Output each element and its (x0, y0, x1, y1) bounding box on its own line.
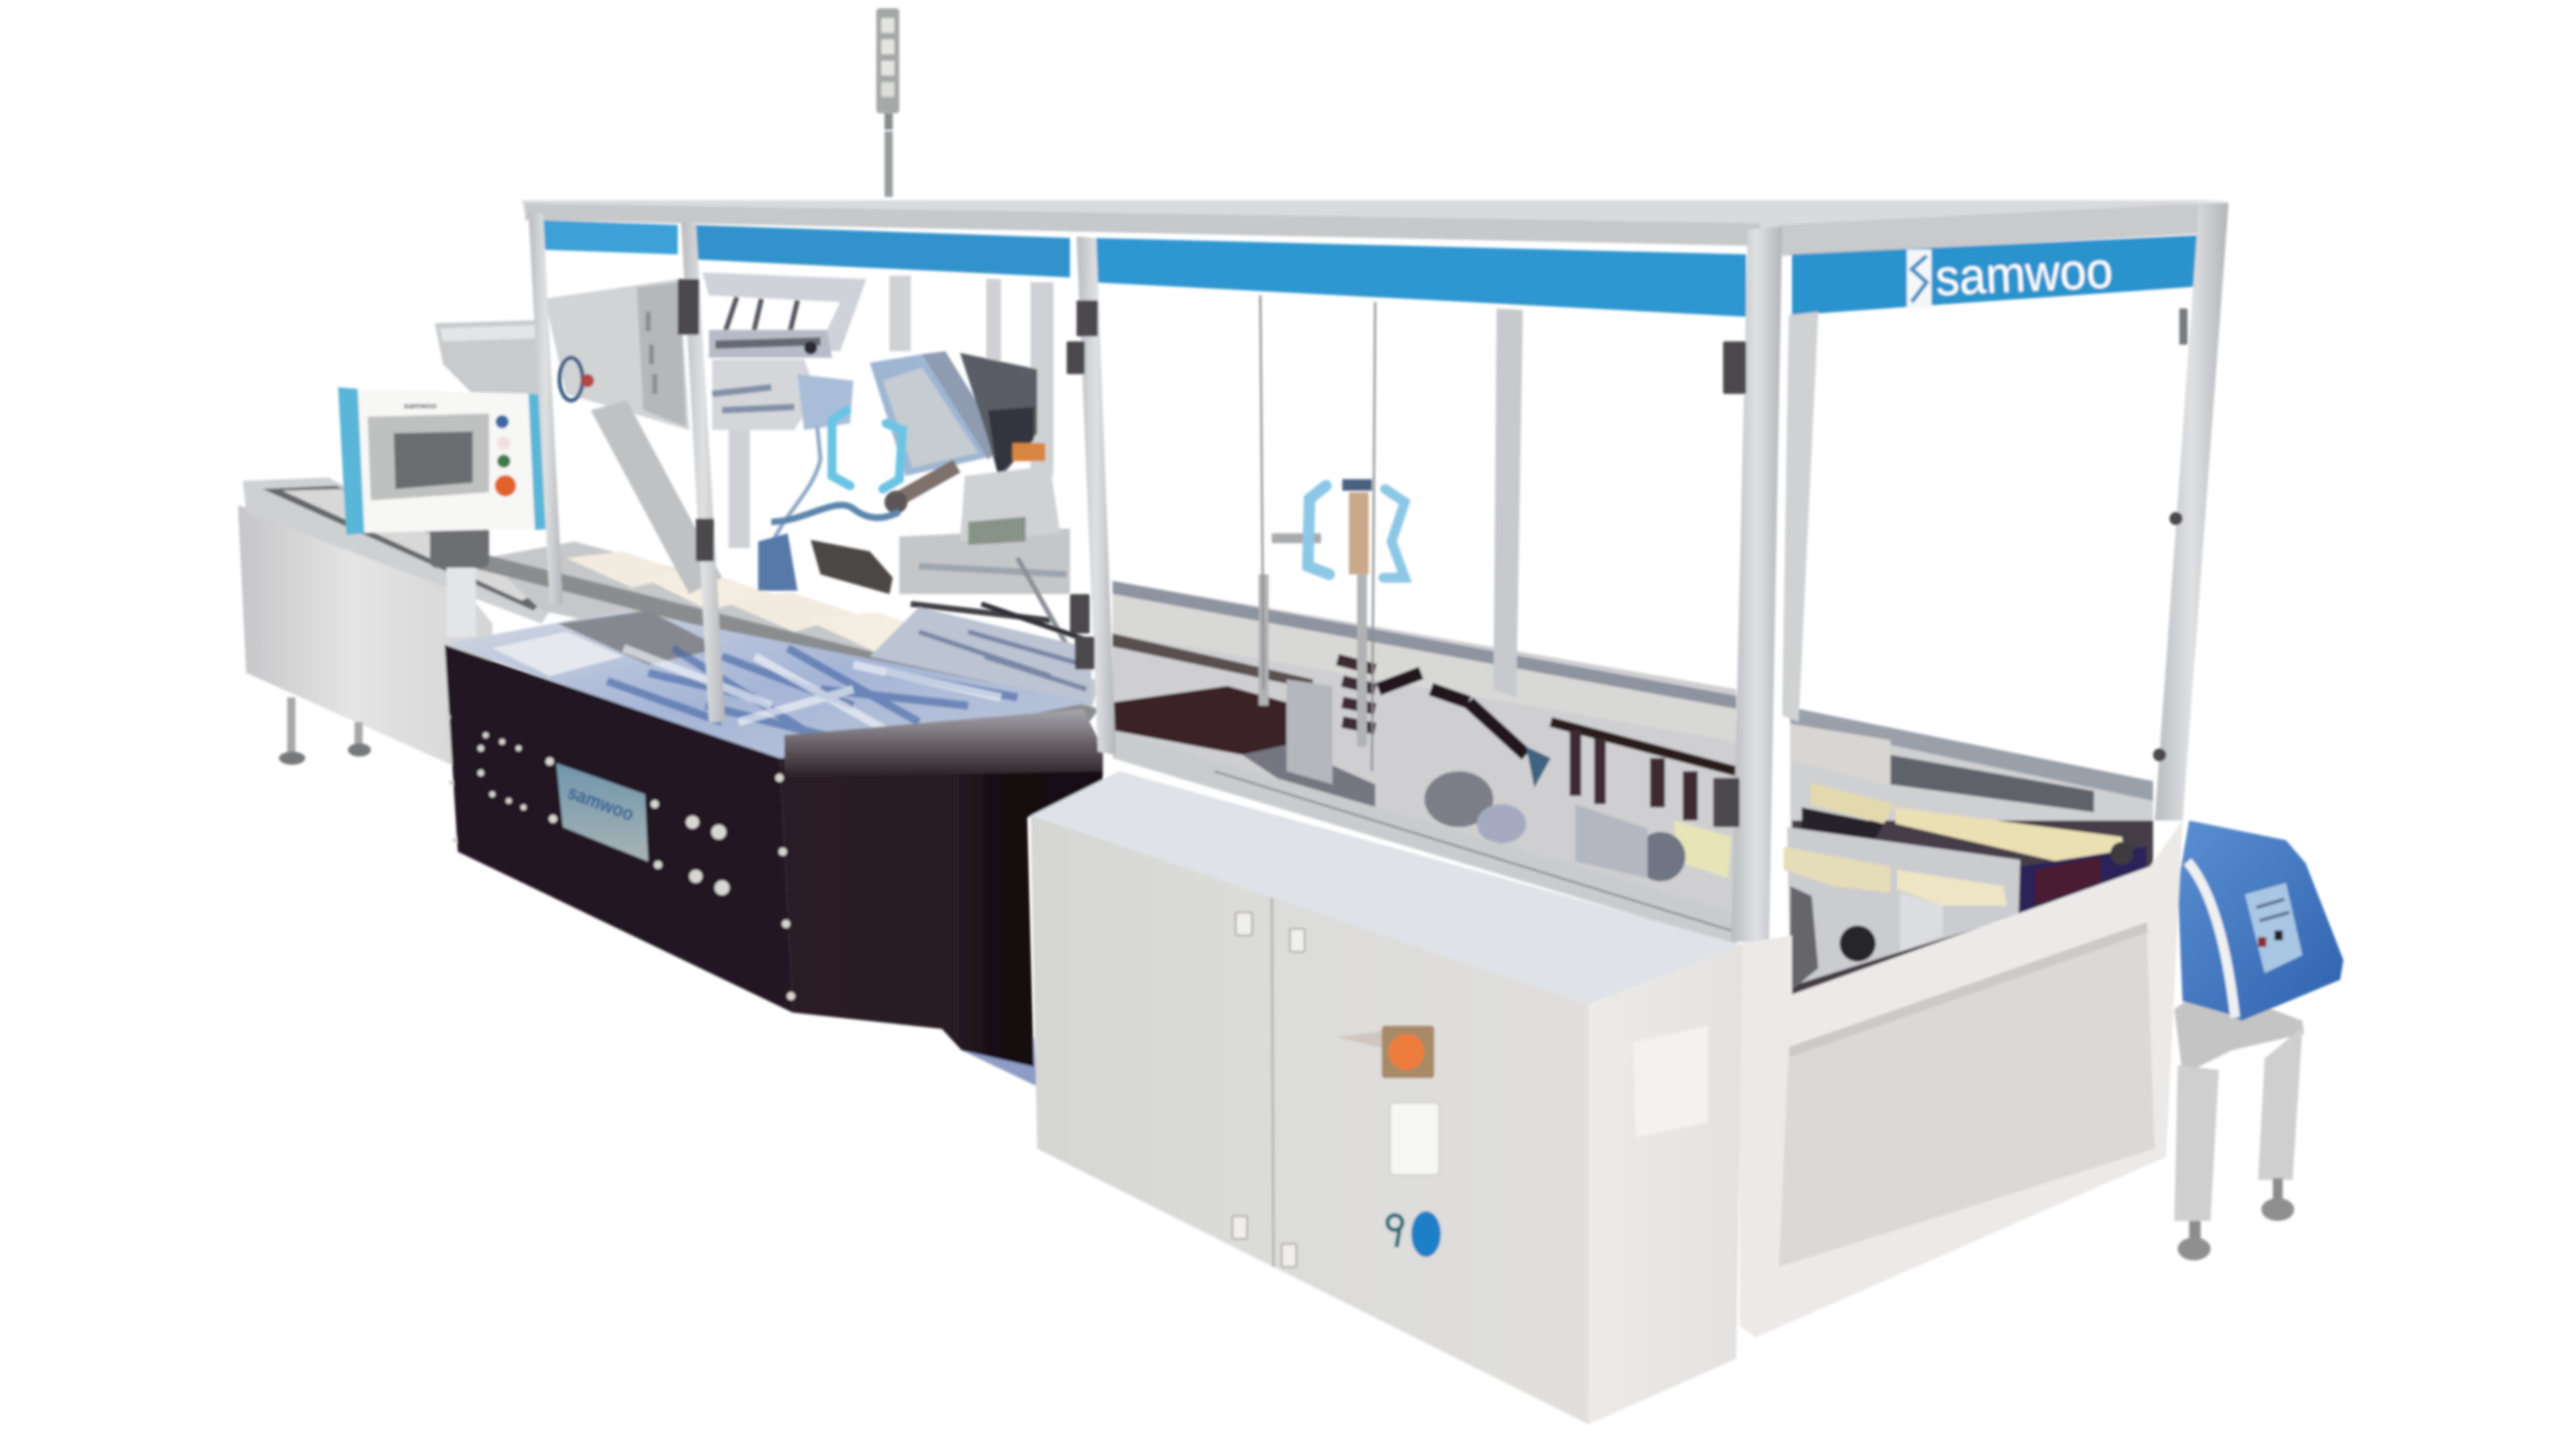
white indicator box (1390, 1103, 1439, 1175)
blue knob (1387, 1211, 1441, 1257)
operator touch panel (338, 387, 558, 535)
frame hinges (678, 279, 2187, 827)
folding mechanism (702, 272, 1096, 656)
stack light tower (876, 8, 899, 197)
stand legs (2174, 985, 2304, 1260)
glass panes (1260, 295, 1818, 771)
studs and switches (446, 715, 795, 1000)
outfeed opening with cream belts (1784, 707, 2153, 994)
glass frame top rails (522, 200, 2229, 256)
mirrored top of black box (446, 610, 1091, 761)
infeed slat conveyor (466, 542, 1099, 738)
hopper and chute (435, 279, 722, 594)
rear uprights (729, 276, 1054, 548)
white side patch (1633, 1026, 1708, 1137)
leveling feet left cabinet (279, 697, 371, 765)
operator touch panel: samwoo (404, 402, 436, 411)
black guard box (445, 645, 1103, 1086)
frame posts (528, 203, 2229, 942)
control plate with logo (556, 763, 648, 862)
right lower panel (1739, 821, 2183, 1337)
cyan handles centre (832, 410, 903, 489)
dark hopper box inside frame (1113, 686, 1287, 755)
control plate with logo: samwoo (564, 782, 637, 826)
blue header panels (532, 220, 2212, 317)
main switch (1337, 1026, 1434, 1078)
cyan handles right (1308, 479, 1405, 578)
door latches (1232, 912, 1305, 1267)
samwoo logo: samwoo (1934, 241, 2114, 306)
blue side unit with legs (2174, 821, 2343, 1260)
main electrical cabinet (1031, 771, 1743, 1424)
pedestal under operator panel (430, 525, 489, 637)
left infeed conveyor cabinet (238, 478, 558, 771)
interior back rail and outfeed (1113, 533, 1736, 945)
centre lower mechanism background (870, 607, 1091, 706)
